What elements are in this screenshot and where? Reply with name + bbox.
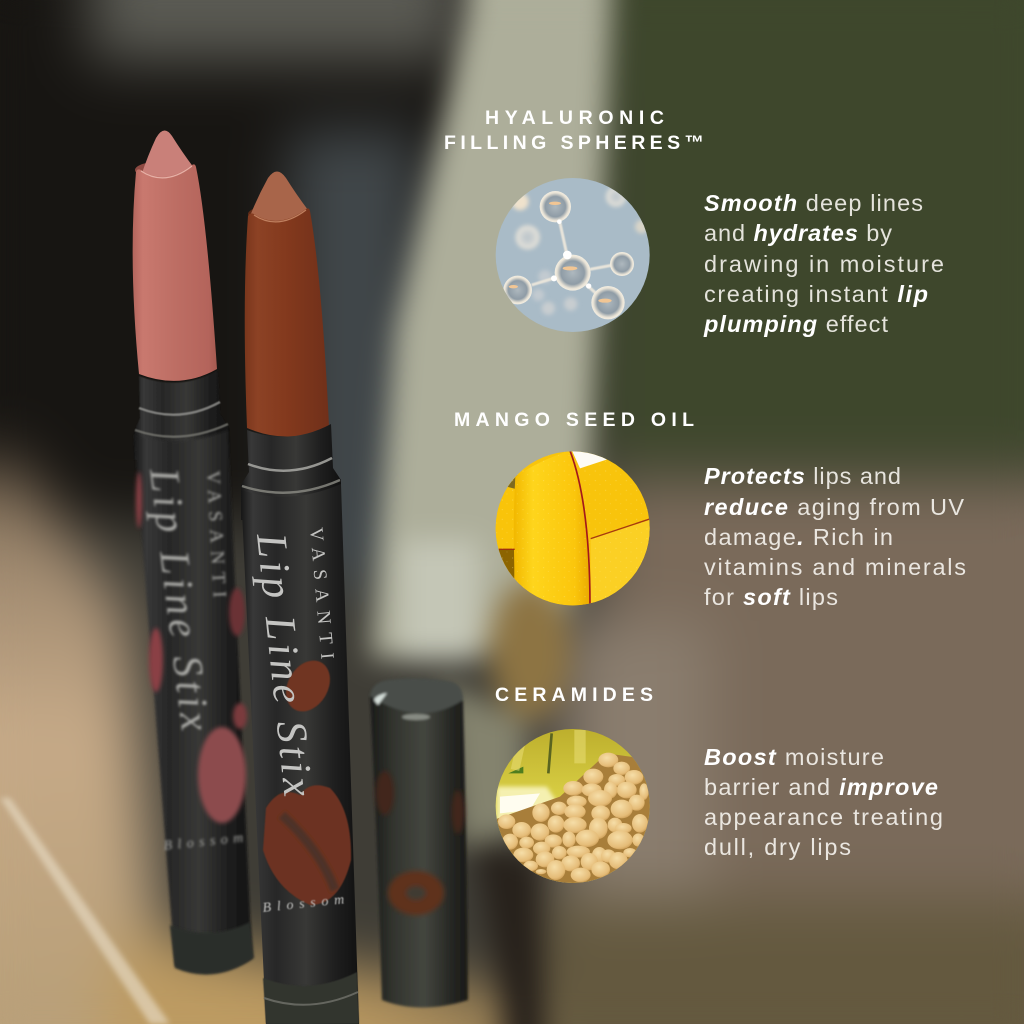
heading: Hyaluronic Filling Spheres (444, 107, 704, 154)
text: ceramides benefit (704, 744, 943, 860)
image: mango slices (493, 450, 653, 607)
crayon tip (141, 130, 194, 180)
lip prints (136, 472, 247, 823)
text: ceramides benefit: barrier and improve (704, 774, 938, 800)
collar (241, 424, 341, 520)
heading: Mango Seed Oil: MANGO SEED OIL (454, 409, 694, 431)
rim opening (135, 161, 195, 179)
text: hyaluronic benefit: creating instant lip (704, 281, 928, 307)
crayon tip (250, 172, 308, 223)
wood edge highlight (0, 798, 170, 1024)
printed label: Lip Line Stix (140, 465, 218, 734)
printed label: VASANTI (305, 527, 338, 663)
text: ceramides benefit: appearance treating (704, 804, 943, 830)
text: ceramides benefit: dull, dry lips (704, 834, 851, 860)
product: left pink lip crayon (133, 130, 254, 975)
text: mango benefit (704, 463, 966, 610)
text: mango benefit: reduce aging from UV (704, 494, 964, 520)
text: mango benefit: Protects lips and (704, 463, 901, 489)
heading: Hyaluronic Filling Spheres: HYALURONIC (485, 107, 664, 129)
barrel (241, 484, 359, 1024)
text: mango benefit: vitamins and minerals (704, 554, 966, 580)
barrel (134, 430, 252, 972)
text: hyaluronic benefit: plumping effect (703, 311, 888, 337)
sleeve (245, 208, 329, 437)
barrel foot (170, 922, 254, 975)
text: mango benefit: for soft lips (704, 584, 838, 610)
rim opening (248, 205, 310, 223)
product: right brown lip crayon (241, 172, 359, 1024)
heading: Ceramides: CERAMIDES (495, 684, 653, 706)
printed label (247, 527, 345, 916)
product: lip crayon cap (370, 678, 468, 1008)
printed label: Blossom (262, 892, 345, 916)
printed label: VASANTI (202, 470, 230, 601)
text: hyaluronic benefit (703, 190, 944, 337)
collar (134, 370, 229, 460)
text: hyaluronic benefit: Smooth deep lines (704, 190, 923, 216)
printed label: Lip Line Stix (247, 530, 321, 799)
printed label: Blossom (163, 831, 244, 854)
lip prints (263, 653, 351, 905)
image: molecule spheres (493, 177, 653, 333)
image: soy beans and oil (493, 727, 653, 887)
text: ceramides benefit: Boost moisture (704, 744, 884, 770)
text: mango benefit: damage. Rich in (704, 524, 893, 550)
printed label (140, 465, 244, 854)
sleeve (133, 164, 217, 381)
text: hyaluronic benefit: drawing in moisture (704, 251, 944, 277)
heading: Hyaluronic Filling Spheres: FILLING SPHERES™ (444, 132, 704, 154)
text: hyaluronic benefit: and hydrates by (704, 220, 892, 246)
